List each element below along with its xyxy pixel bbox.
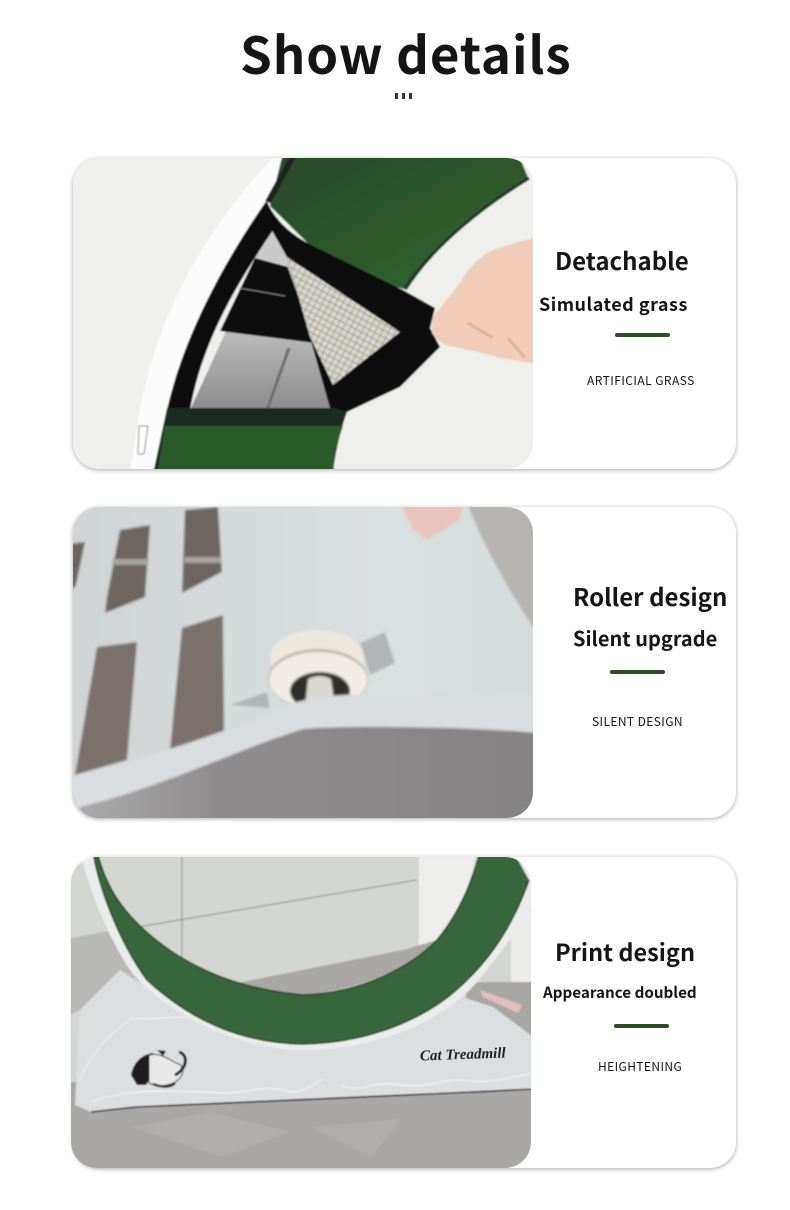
- pink part: [400, 502, 463, 540]
- floor patches: [131, 1112, 401, 1157]
- panel: detachable: [73, 158, 736, 469]
- brand text on base: Cat Treadmill: [420, 1046, 506, 1064]
- floor: [66, 1082, 536, 1173]
- icon: cat print: [131, 1050, 185, 1087]
- top right background: [467, 502, 538, 635]
- wave line: [91, 1073, 531, 1102]
- upper green grass: [270, 153, 529, 290]
- wall: [66, 852, 536, 1092]
- vent slots: [68, 507, 224, 775]
- clip tab: [138, 426, 148, 454]
- subheading: Silent upgrade: [573, 623, 717, 652]
- photo: treadmill: [71, 857, 531, 1168]
- caption: HEIGHTENING: [598, 1058, 682, 1075]
- black frame: [167, 200, 273, 410]
- mesh backing: [287, 257, 400, 385]
- window: [190, 228, 335, 410]
- black inner bands: [220, 258, 315, 343]
- tile lines: [138, 852, 417, 972]
- photo: grass panel: [73, 158, 533, 469]
- green grass: [93, 852, 529, 1044]
- white ring: [80, 852, 536, 1050]
- caption: ARTIFICIAL GRASS: [587, 372, 695, 389]
- front lip: [68, 693, 538, 807]
- subheading: Appearance doubled: [543, 981, 697, 1003]
- heading: Roller design: [573, 578, 727, 613]
- title dots: [395, 93, 413, 99]
- rear track gaps: [360, 632, 395, 675]
- heading: Print design: [555, 934, 695, 968]
- divider bar: [610, 670, 665, 674]
- hand: [432, 237, 538, 364]
- divider bar: [615, 333, 670, 337]
- panel: roller: [73, 507, 736, 818]
- base: [75, 970, 536, 1112]
- pink accessory: [480, 990, 522, 1013]
- divider bar: [614, 1024, 669, 1028]
- panel: print: [73, 857, 736, 1168]
- title: Show details: [240, 15, 572, 89]
- wall inside wheel: [97, 852, 480, 995]
- roller wheel: [268, 630, 368, 710]
- floor right: [466, 982, 536, 1057]
- caption: SILENT DESIGN: [592, 713, 683, 730]
- subheading: Simulated grass: [539, 291, 688, 317]
- base lower shadow face: [80, 726, 538, 823]
- photo: roller: [73, 507, 533, 818]
- left lower wall: [66, 925, 141, 1017]
- black velcro flap: [267, 202, 440, 412]
- white ring edge: [130, 153, 290, 474]
- heading: Detachable: [555, 242, 689, 277]
- floor inside wheel: [237, 940, 437, 995]
- lower green grass: [153, 408, 347, 474]
- white wall column: [419, 852, 476, 952]
